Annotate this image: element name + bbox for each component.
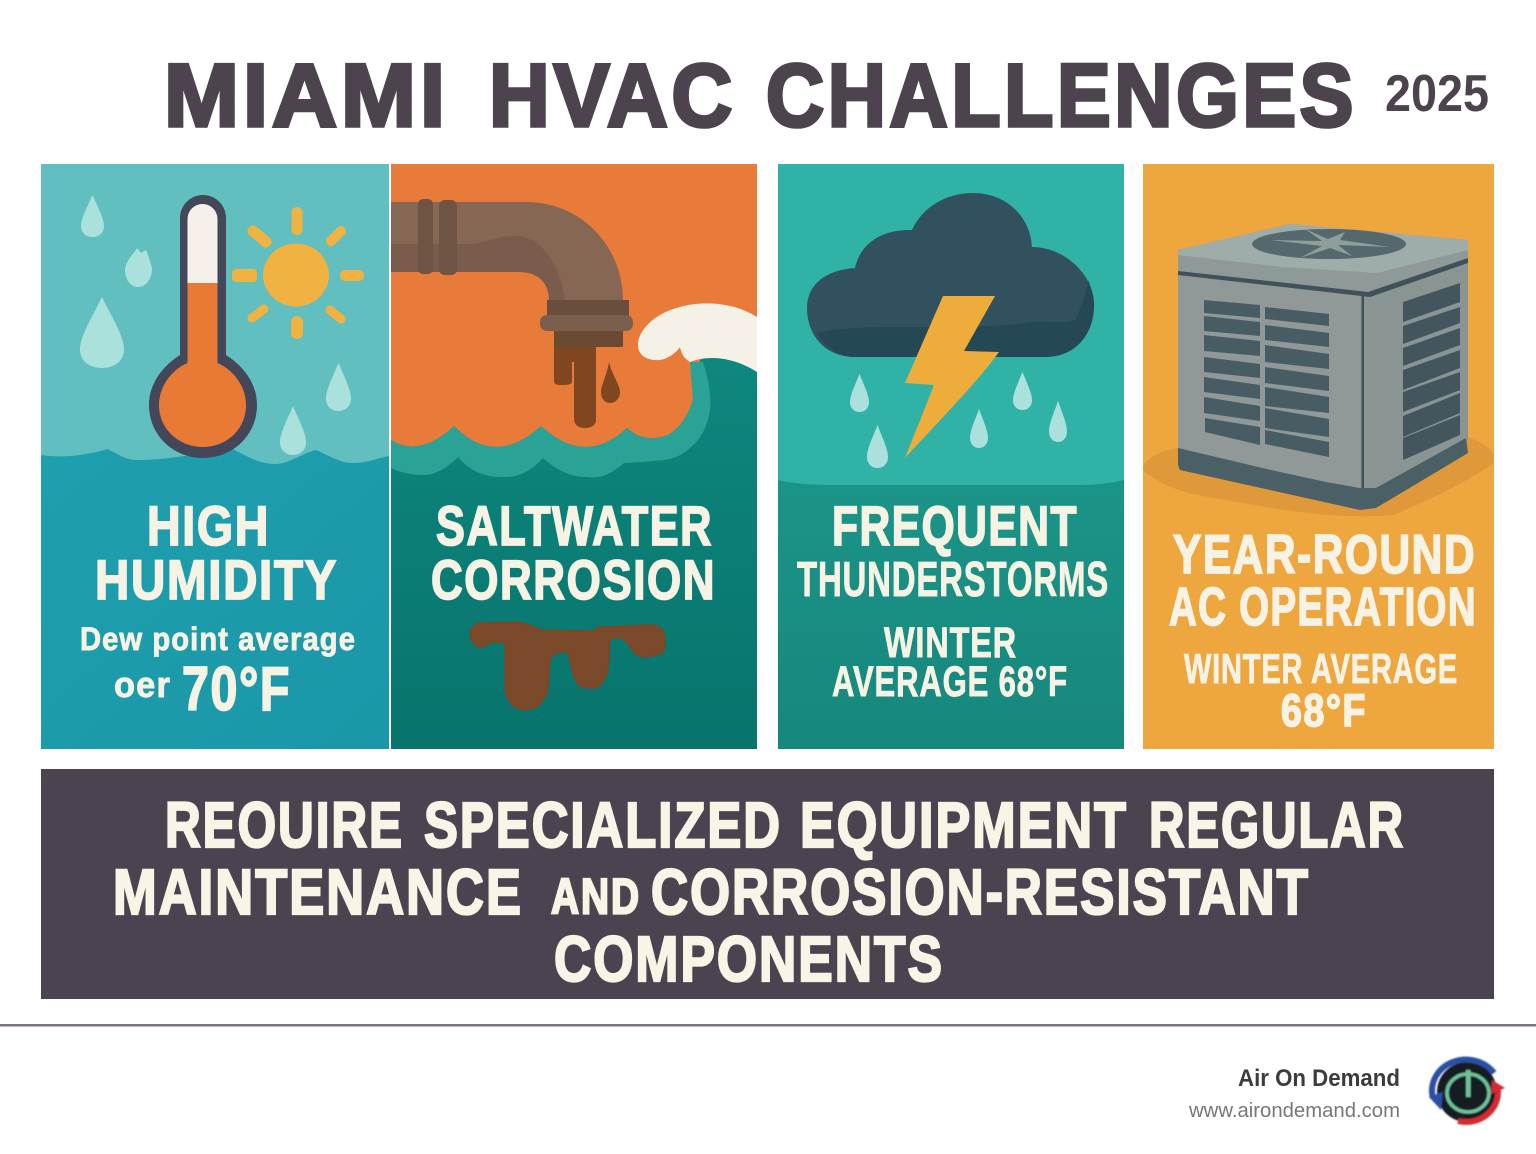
footer: brand text: Air On Demand bbox=[1238, 1065, 1400, 1092]
heading: frequent thunderstorms: THUNDERSTORMS bbox=[797, 553, 1109, 607]
heading: saltwater corrosion bbox=[431, 494, 716, 611]
heading: frequent thunderstorms: FREQUENT bbox=[832, 494, 1078, 557]
title: 2025 bbox=[1385, 65, 1489, 123]
title: MIAMI bbox=[164, 45, 449, 145]
heading: saltwater corrosion: CORROSION bbox=[431, 548, 716, 611]
text: dew point: oer bbox=[114, 664, 171, 705]
icon: thermometer bbox=[149, 195, 257, 458]
footer: brand text bbox=[1188, 1065, 1400, 1122]
banner text: EQUIPMENT bbox=[800, 789, 1128, 861]
icon: rust drips bbox=[554, 347, 620, 428]
right grille bbox=[1403, 283, 1460, 460]
unit ground shadow bbox=[1143, 437, 1494, 516]
banner text: MAINTENANCE bbox=[113, 856, 523, 928]
text: dew point bbox=[80, 621, 356, 724]
banner text: CORROSION-RESISTANT bbox=[651, 856, 1310, 928]
text: winter average 68°F: 68°F bbox=[1281, 685, 1367, 736]
banner text: SPECIALIZED bbox=[424, 789, 782, 861]
water band bbox=[41, 449, 389, 749]
icon: wave crest bbox=[638, 303, 757, 372]
icon: outdoor AC unit bbox=[1178, 224, 1468, 510]
heading: high humidity bbox=[95, 494, 338, 611]
banner: conclusion bbox=[41, 769, 1494, 999]
panel: saltwater corrosion bbox=[391, 164, 757, 749]
panel: high humidity bbox=[41, 164, 389, 749]
text: dew point: 70°F bbox=[182, 655, 291, 724]
icon: sun bbox=[232, 207, 364, 339]
banner text: REGULAR bbox=[1149, 789, 1405, 861]
heading: high humidity: HIGH bbox=[147, 494, 270, 557]
text: winter average: WINTER bbox=[884, 619, 1017, 667]
title: CHALLENGES bbox=[766, 45, 1357, 145]
footer: brand text: www.airondemand.com bbox=[1188, 1100, 1400, 1122]
banner text bbox=[113, 789, 1405, 995]
heading: saltwater corrosion: SALTWATER bbox=[436, 494, 713, 557]
icon: rain drops bbox=[850, 372, 1067, 468]
panel: frequent thunderstorms bbox=[778, 164, 1124, 749]
lower band bbox=[778, 480, 1124, 749]
icon: lightning bolt bbox=[905, 296, 999, 458]
banner text: COMPONENTS bbox=[554, 923, 944, 995]
icon: humidity drops bbox=[80, 195, 351, 455]
title: HVAC bbox=[489, 45, 736, 145]
left grille bbox=[1204, 300, 1329, 457]
banner text: REOUIRE bbox=[165, 789, 404, 861]
footer rule bbox=[0, 1024, 1536, 1026]
heading: frequent thunderstorms bbox=[797, 494, 1109, 607]
icon: rusty pipe bbox=[391, 199, 633, 347]
title bbox=[164, 45, 1489, 145]
text: winter average bbox=[832, 619, 1068, 706]
heading: high humidity: HUMIDITY bbox=[95, 548, 338, 611]
icon: rust stain bbox=[470, 622, 665, 710]
icon: company logo bbox=[1429, 1060, 1505, 1122]
icon: storm cloud bbox=[807, 193, 1094, 357]
heading: year-round AC operation bbox=[1169, 523, 1477, 637]
text: dew point: Dew point average bbox=[80, 621, 356, 657]
orange sky bbox=[391, 164, 757, 447]
teal sea bbox=[391, 362, 710, 477]
text: winter average 68°F bbox=[1184, 645, 1458, 736]
banner text: AND bbox=[551, 868, 641, 924]
panel: year-round AC operation bbox=[1143, 164, 1494, 749]
text: winter average: AVERAGE 68°F bbox=[832, 658, 1068, 706]
